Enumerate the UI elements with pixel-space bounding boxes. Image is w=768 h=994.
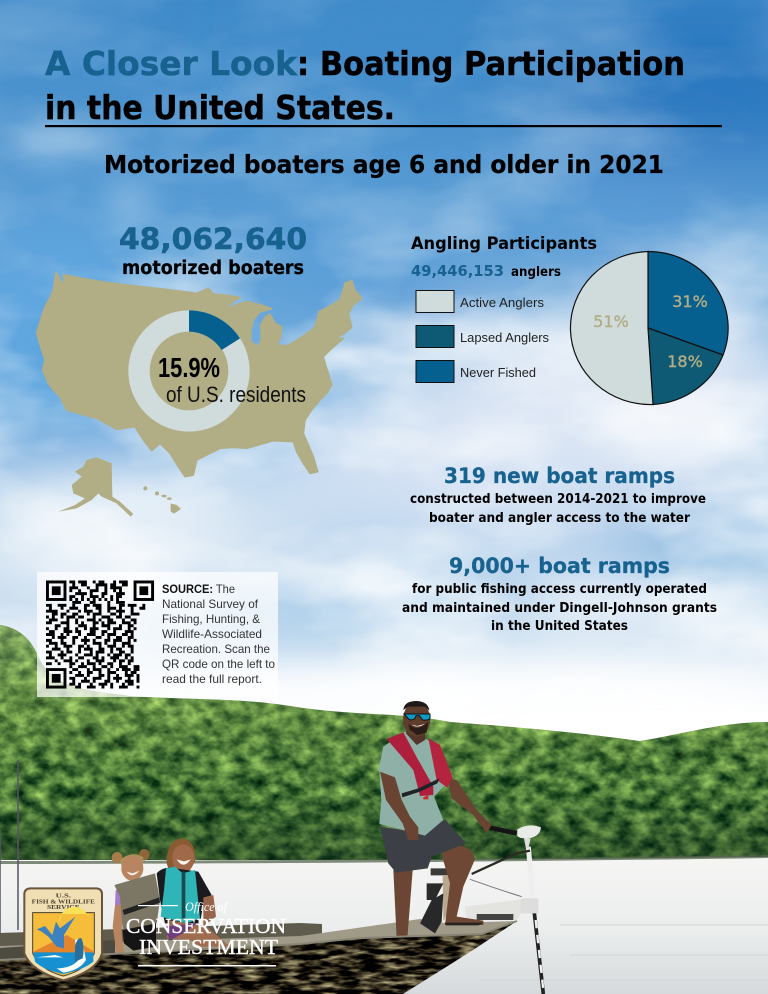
source text: Fishing, Hunting, & xyxy=(162,612,260,626)
statistic: new boat ramps: boater and angler access to the water xyxy=(429,510,690,526)
donut label: 15.9% xyxy=(158,352,220,383)
treeline xyxy=(0,625,768,860)
Office of Conservation Investment wordmark: CONSERVATION xyxy=(126,914,286,938)
near arm in front of shirt xyxy=(380,772,418,840)
source text: QR code on the left to xyxy=(162,657,275,671)
statistic: motorized boaters: motorized boaters xyxy=(122,258,304,279)
Office of Conservation Investment wordmark: Office of xyxy=(185,899,229,914)
statistic: motorized boaters xyxy=(119,222,307,279)
Office of Conservation Investment wordmark xyxy=(126,899,286,966)
source text: SOURCE: The xyxy=(162,582,235,596)
statistic: public boat ramps xyxy=(402,554,717,634)
statistic: public boat ramps: 9,000+ boat ramps xyxy=(449,554,670,579)
source text: read the full report. xyxy=(162,672,262,686)
Office of Conservation Investment wordmark: INVESTMENT xyxy=(139,935,278,959)
contiguous United States xyxy=(37,272,362,477)
source text: Wildlife-Associated xyxy=(162,627,262,641)
photo: two children on the boat xyxy=(112,838,230,953)
statistic: public boat ramps: in the United States xyxy=(491,618,628,634)
neck and head xyxy=(406,723,425,745)
title: : Boating Participation xyxy=(297,44,685,83)
statistic: new boat ramps: constructed between 2014-2021 to improve xyxy=(410,491,706,507)
QR code xyxy=(46,582,153,687)
donut label: of U.S. residents xyxy=(166,382,306,407)
pie chart: angling participants: 31% xyxy=(672,292,708,311)
legend: Active Anglers xyxy=(460,295,545,310)
girl on right xyxy=(157,838,230,947)
map of United States with residents donut xyxy=(37,272,362,517)
legend: Never Fished xyxy=(460,365,536,380)
heading: angling participants: 49,446,153 xyxy=(411,262,504,280)
legend xyxy=(416,290,549,382)
source text: National Survey of xyxy=(162,597,259,611)
photo: man at the bow with trolling motor xyxy=(378,701,543,994)
girl on left xyxy=(112,849,160,953)
heading: angling participants: Angling Participants xyxy=(411,234,597,254)
Fish and Wildlife Service shield logo xyxy=(24,888,102,980)
legend: Lapsed Anglers xyxy=(460,330,549,345)
shorts xyxy=(380,819,466,873)
donut label xyxy=(158,352,306,407)
heading: angling participants xyxy=(411,234,597,280)
trolling motor xyxy=(420,825,543,994)
title: in the United States. xyxy=(45,88,395,127)
far arm xyxy=(447,778,492,833)
pie chart: angling participants xyxy=(570,251,728,405)
Fish and Wildlife Service shield logo: FISH & WILDLIFE xyxy=(32,899,95,906)
life vest xyxy=(387,732,433,796)
subtitle: Motorized boaters age 6 and older in 2021 xyxy=(104,150,664,179)
statistic: public boat ramps: for public fishing access currently operated xyxy=(412,581,707,597)
shirt xyxy=(378,732,453,836)
legs xyxy=(393,870,413,938)
donut chart 15.9% xyxy=(139,310,240,421)
statistic: motorized boaters: 48,062,640 xyxy=(119,222,307,256)
source text xyxy=(162,582,275,686)
statistic: new boat ramps: 319 new boat ramps xyxy=(444,464,675,489)
statistic: new boat ramps xyxy=(410,464,706,526)
lake water xyxy=(0,857,768,994)
photo: camouflage hull xyxy=(0,921,517,994)
Fish and Wildlife Service shield logo: U.S. xyxy=(56,893,72,900)
statistic: public boat ramps: and maintained under Dingell-Johnson grants xyxy=(402,600,717,616)
cloud texture xyxy=(0,0,768,720)
source text: Recreation. Scan the xyxy=(162,642,270,656)
title xyxy=(45,44,722,127)
Alaska and Hawaii xyxy=(58,457,181,517)
title: A Closer Look xyxy=(45,44,298,83)
pie chart: angling participants: 18% xyxy=(667,352,703,371)
photo: boat interior and deck xyxy=(0,760,517,962)
heading: angling participants: anglers xyxy=(511,264,561,280)
pie chart: angling participants: 51% xyxy=(593,312,629,331)
source panel xyxy=(37,572,278,697)
Fish and Wildlife Service shield logo: SERVICE xyxy=(47,905,80,911)
